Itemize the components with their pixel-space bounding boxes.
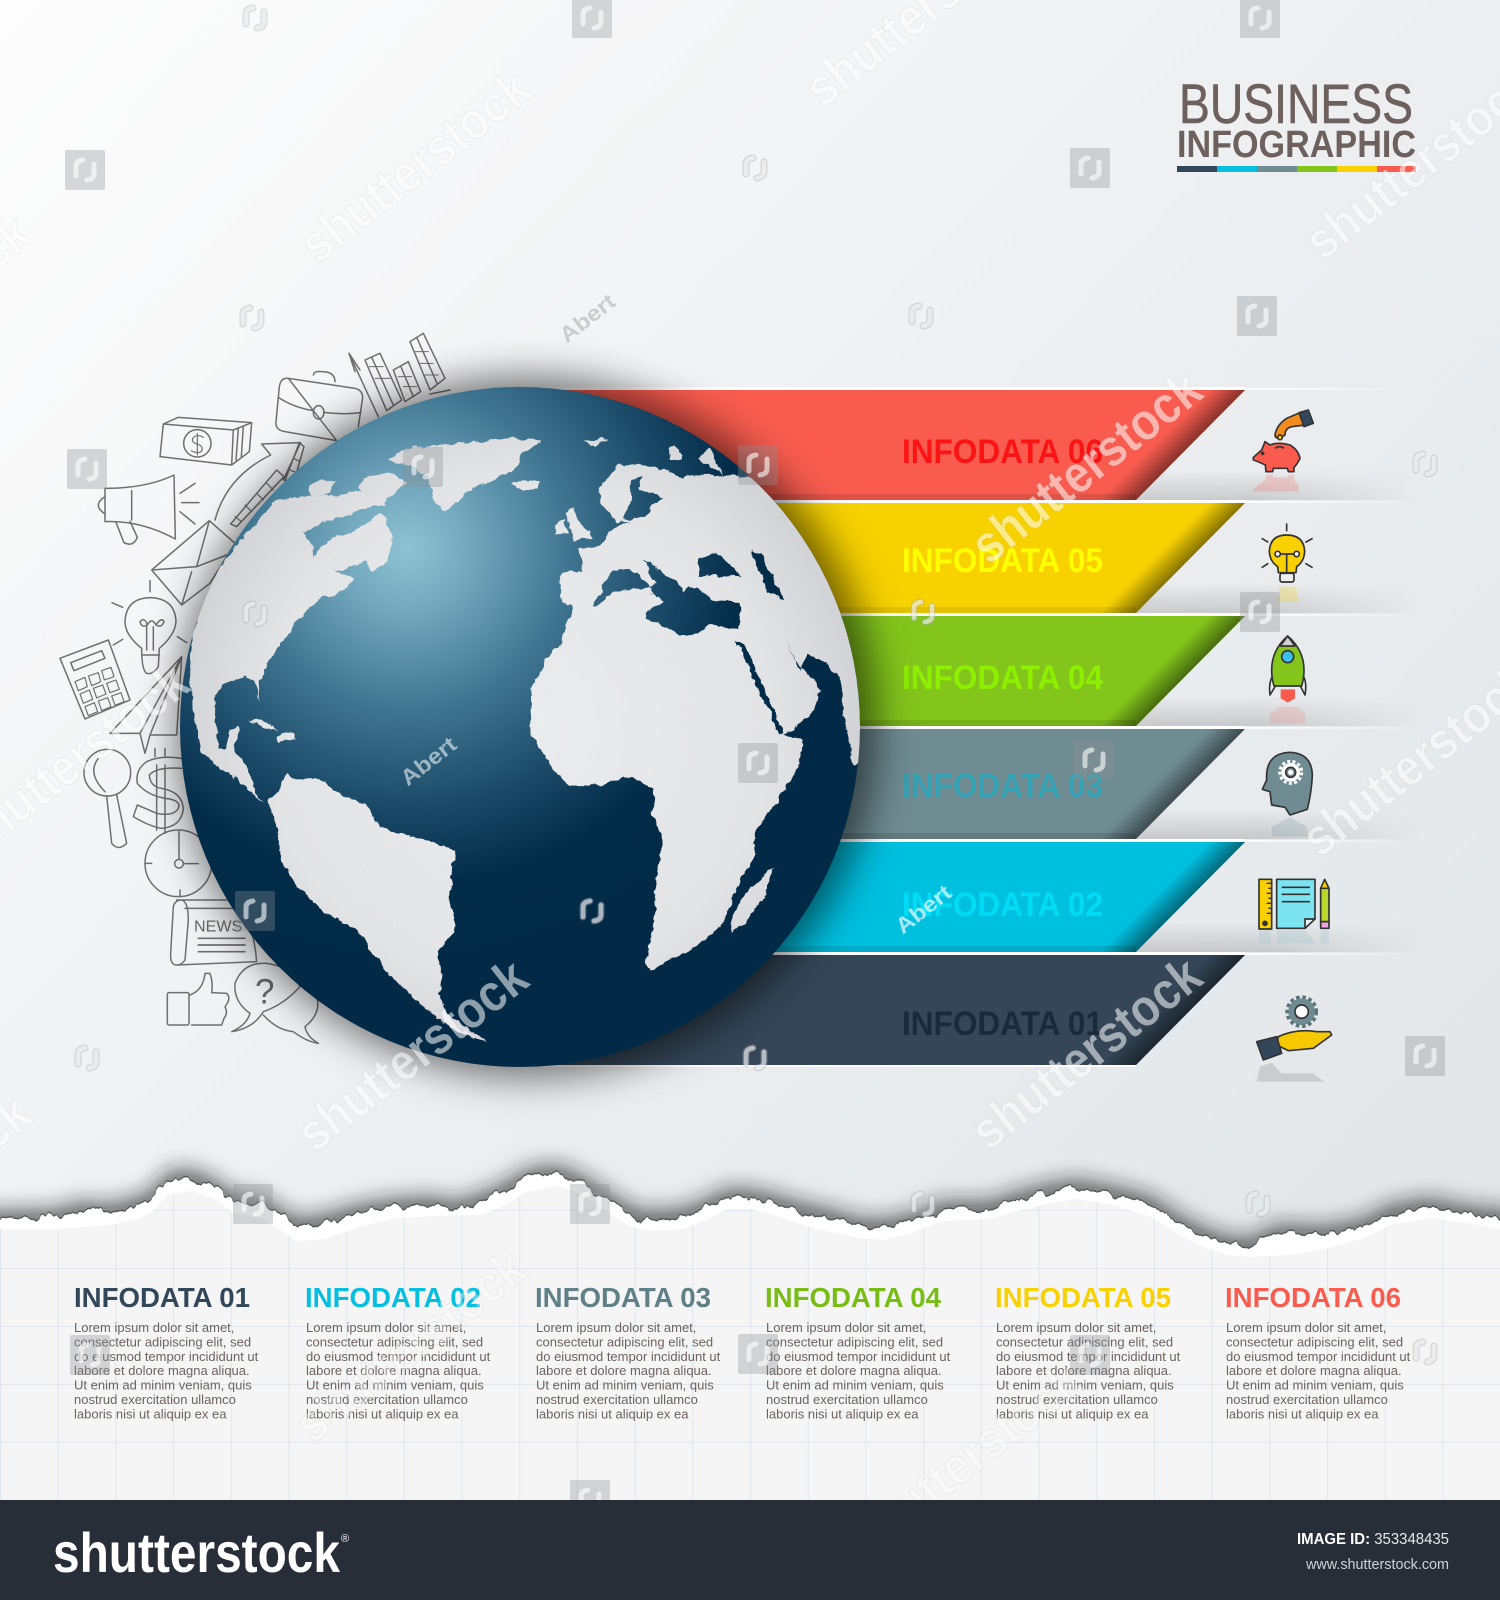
right-side rows background lines and shadows (1136, 388, 1382, 955)
icon: question speech bubbles doodle (232, 963, 318, 1043)
icon: paper plane doodle (110, 657, 182, 753)
title colour bar (1177, 166, 1416, 172)
lower sheet with grid (0, 1170, 1500, 1500)
footer url: www.shutterstock.com (1305, 1556, 1449, 1573)
text block 06: labore et dolore magna aliqua. (1226, 1363, 1402, 1378)
text block 05: labore et dolore magna aliqua. (996, 1363, 1172, 1378)
label: infodata 06: INFODATA 06 (902, 433, 1103, 471)
column: infodata 01: INFODATA 01 (74, 1282, 250, 1313)
text block 01: laboris nisi ut aliquip ex ea (74, 1406, 227, 1421)
text block 03: labore et dolore magna aliqua. (536, 1363, 712, 1378)
text block 01: Ut enim ad minim veniam, quis (74, 1378, 252, 1393)
text block 02: consectetur adipiscing elit, sed (306, 1334, 483, 1349)
column: infodata 03: INFODATA 03 (535, 1282, 711, 1313)
column: infodata 06: INFODATA 06 (1225, 1282, 1401, 1313)
text block 02: labore et dolore magna aliqua. (306, 1363, 482, 1378)
text block 01: consectetur adipiscing elit, sed (74, 1334, 251, 1349)
text block 06: do eiusmod tempor incididunt ut (1226, 1349, 1411, 1364)
footer registered mark: ® (341, 1533, 349, 1545)
continents (190, 438, 880, 1042)
text block 02: Lorem ipsum dolor sit amet, (306, 1320, 466, 1335)
abert watermarks (395, 288, 957, 939)
column: infodata 04 (765, 1282, 951, 1421)
abert watermarks: Abert (890, 879, 957, 939)
band: infodata 05 (540, 500, 1245, 613)
icon: head with gear (1262, 752, 1312, 837)
text block 05: laboris nisi ut aliquip ex ea (996, 1406, 1149, 1421)
icon: ruler, document and pencil (1259, 879, 1329, 943)
text block 01: do eiusmod tempor incididunt ut (74, 1349, 259, 1364)
band: infodata 06 (540, 387, 1245, 500)
band: infodata 02 (540, 839, 1245, 952)
label: infodata 02: INFODATA 02 (902, 886, 1103, 924)
text block 02: nostrud exercitation ullamco (306, 1392, 468, 1407)
icon: light bulb (1262, 523, 1313, 602)
column: infodata 05: INFODATA 05 (995, 1282, 1171, 1313)
globe (180, 387, 880, 1067)
text block 03: consectetur adipiscing elit, sed (536, 1334, 713, 1349)
text block 04: Lorem ipsum dolor sit amet, (766, 1320, 926, 1335)
footer bar (0, 1500, 1500, 1600)
text block 04: nostrud exercitation ullamco (766, 1392, 928, 1407)
icon: newspaper doodle (171, 900, 257, 965)
text block 06: consectetur adipiscing elit, sed (1226, 1334, 1403, 1349)
icon: calculator doodle (60, 640, 130, 719)
title: business infographic (1177, 72, 1416, 172)
icon: hand holding gear (1257, 997, 1332, 1082)
text block 06: laboris nisi ut aliquip ex ea (1226, 1406, 1379, 1421)
column: infodata 02: INFODATA 02 (305, 1282, 481, 1313)
text block 03: Lorem ipsum dolor sit amet, (536, 1320, 696, 1335)
column: infodata 04: INFODATA 04 (765, 1282, 941, 1313)
text block 05: consectetur adipiscing elit, sed (996, 1334, 1173, 1349)
diagonal shutterstock watermarks: shutterstock (960, 946, 1213, 1161)
column: infodata 05 (995, 1282, 1181, 1421)
text block 02: laboris nisi ut aliquip ex ea (306, 1406, 459, 1421)
text block 03: nostrud exercitation ullamco (536, 1392, 698, 1407)
diagonal shutterstock watermarks: shutterstock (284, 1239, 537, 1454)
icon: growth arrow doodle (215, 443, 304, 527)
label: infodata 05: INFODATA 05 (902, 542, 1103, 580)
icon: briefcase doodle (276, 371, 363, 441)
text block 04: Ut enim ad minim veniam, quis (766, 1378, 944, 1393)
icon: thumbs up doodle (167, 973, 229, 1025)
label: infodata 03: INFODATA 03 (902, 767, 1103, 805)
icon: rocket (1270, 636, 1306, 723)
column: infodata 01 (74, 1282, 259, 1421)
band: infodata 04 (540, 613, 1245, 726)
text block 03: Ut enim ad minim veniam, quis (536, 1378, 714, 1393)
text block 05: Ut enim ad minim veniam, quis (996, 1378, 1174, 1393)
band: infodata 03 (540, 726, 1245, 839)
text block 04: labore et dolore magna aliqua. (766, 1363, 942, 1378)
abert watermarks: Abert (395, 731, 462, 791)
text block 06: nostrud exercitation ullamco (1226, 1392, 1388, 1407)
icon: money doodle (160, 417, 252, 465)
torn paper edge (0, 1163, 1500, 1300)
band: infodata 01 (540, 952, 1245, 1067)
footer logo: shutterstock (53, 1521, 341, 1584)
diagonal shutterstock watermarks: shutterstock (960, 360, 1213, 575)
column: infodata 02 (305, 1282, 491, 1421)
footer image id: IMAGE ID: 353348435 (1297, 1531, 1449, 1548)
icon: envelope doodle (152, 521, 235, 605)
icon: dollar sign doodle (133, 748, 183, 833)
column: infodata 06 (1225, 1282, 1411, 1421)
globe drop shadow (177, 377, 877, 1077)
text block 05: do eiusmod tempor incididunt ut (996, 1349, 1181, 1364)
icon: bar chart doodle (349, 333, 450, 417)
text block 05: nostrud exercitation ullamco (996, 1392, 1158, 1407)
text block 02: Ut enim ad minim veniam, quis (306, 1378, 484, 1393)
icon: clock doodle (145, 830, 212, 897)
diagonal shutterstock watermarks: shutterstock (289, 59, 542, 274)
doodle icons around globe, lower (84, 748, 318, 1043)
abert watermarks: Abert (554, 288, 621, 348)
text block 01: labore et dolore magna aliqua. (74, 1363, 250, 1378)
text block 05: Lorem ipsum dolor sit amet, (996, 1320, 1156, 1335)
text block 03: do eiusmod tempor incididunt ut (536, 1349, 721, 1364)
icon: question speech bubbles doodle: ? (255, 972, 274, 1011)
label: infodata 04: INFODATA 04 (902, 659, 1103, 697)
band labels (902, 433, 1103, 1043)
icon: magnifying glass doodle (84, 749, 131, 847)
text block 03: laboris nisi ut aliquip ex ea (536, 1406, 689, 1421)
text block 01: nostrud exercitation ullamco (74, 1392, 236, 1407)
column: infodata 03 (535, 1282, 721, 1421)
text block 06: Lorem ipsum dolor sit amet, (1226, 1320, 1386, 1335)
text block 02: do eiusmod tempor incididunt ut (306, 1349, 491, 1364)
icon: newspaper doodle: NEWS (194, 919, 242, 936)
diagonal shutterstock watermarks: shutterstock (840, 1352, 1093, 1567)
text block 01: Lorem ipsum dolor sit amet, (74, 1320, 234, 1335)
text block 06: Ut enim ad minim veniam, quis (1226, 1378, 1404, 1393)
label: infodata 01: INFODATA 01 (902, 1005, 1103, 1043)
title: business infographic: INFOGRAPHIC (1177, 124, 1416, 166)
text block 04: do eiusmod tempor incididunt ut (766, 1349, 951, 1364)
doodle icons around globe, upper (60, 333, 450, 753)
icon: megaphone doodle (98, 475, 199, 544)
diagonal shutterstock watermarks: shutterstock (286, 948, 539, 1163)
title: business infographic: BUSINESS (1179, 72, 1413, 135)
text block 04: consectetur adipiscing elit, sed (766, 1334, 943, 1349)
icon: piggy bank with hand (1253, 410, 1313, 492)
icon: light bulb doodle (112, 581, 187, 674)
text block 04: laboris nisi ut aliquip ex ea (766, 1406, 919, 1421)
